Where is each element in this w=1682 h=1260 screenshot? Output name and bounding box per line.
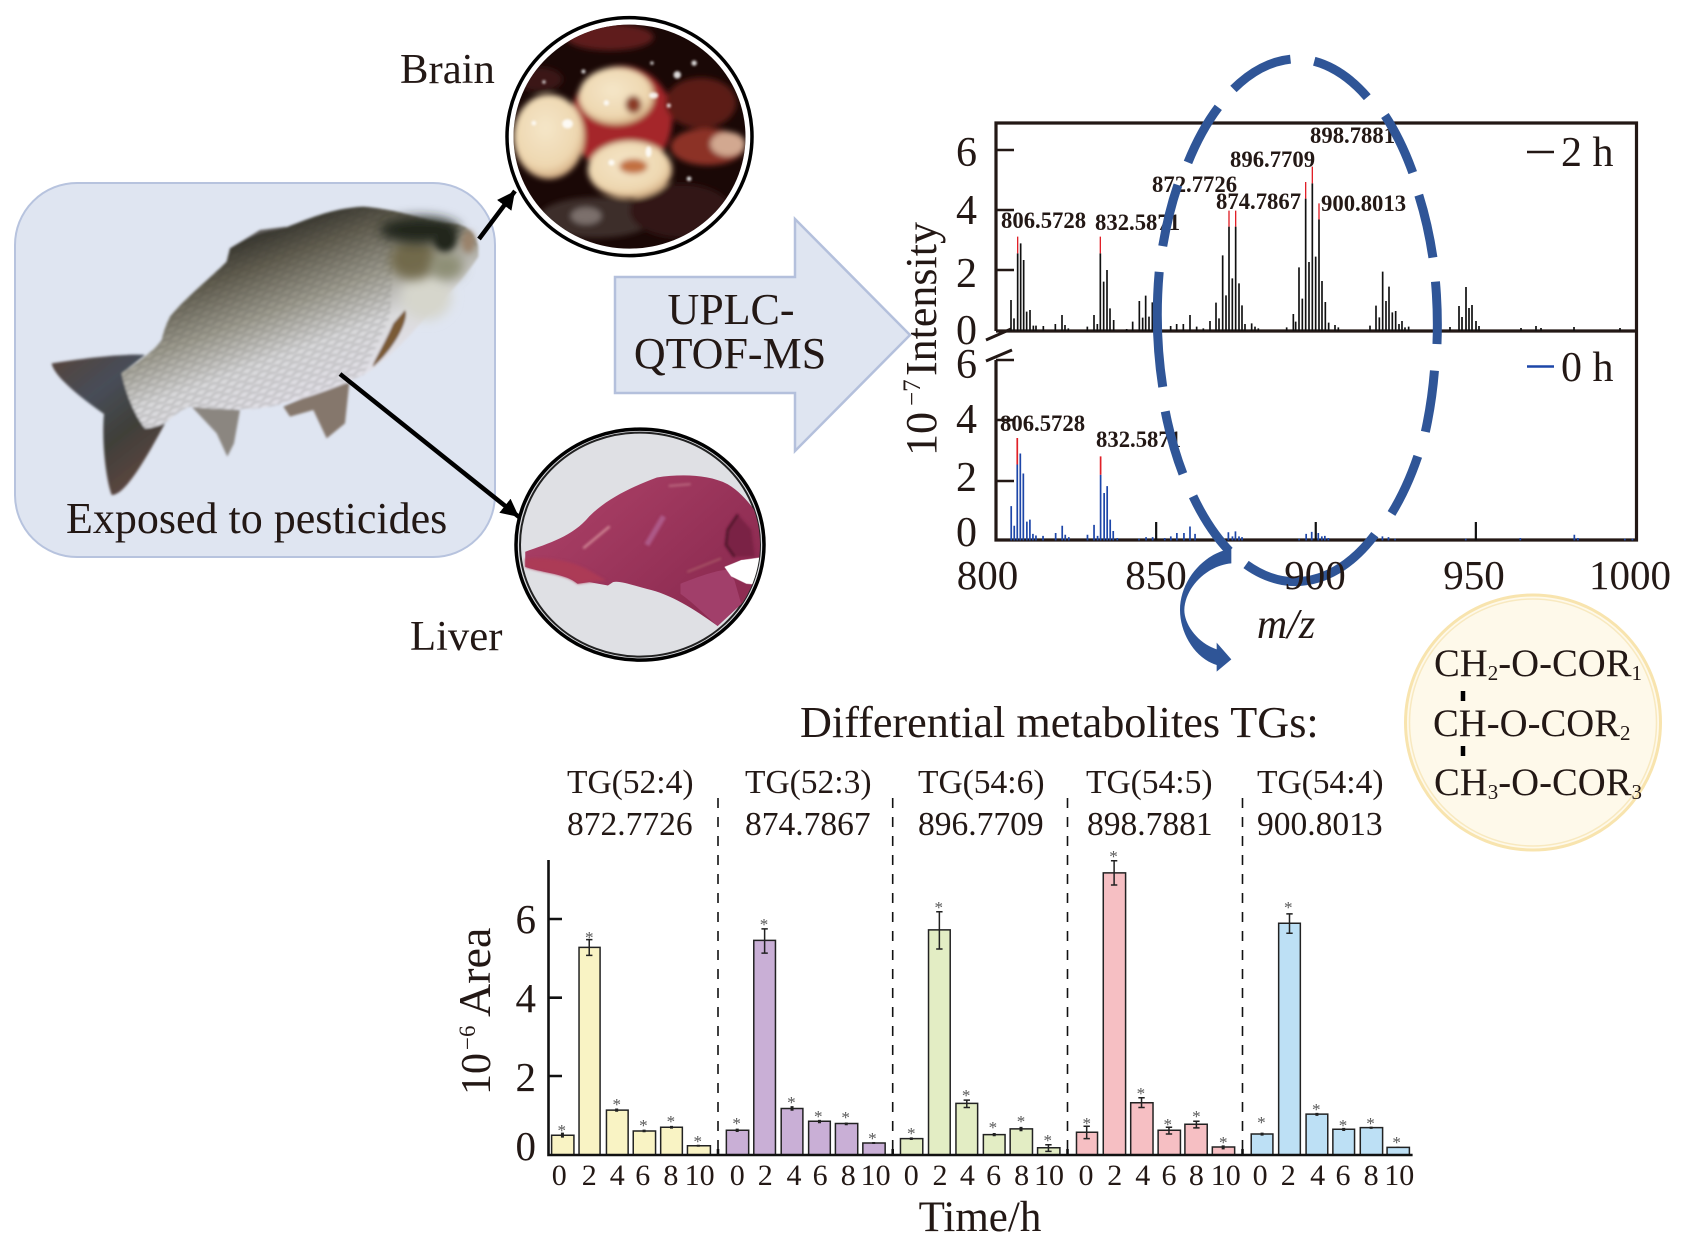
- spectrum y tick labels: 6: [956, 342, 977, 388]
- mass spectrum chart: [897, 123, 1636, 556]
- legend: 2 h: [1527, 130, 1614, 176]
- spectrum y axis label: −7: [899, 379, 926, 406]
- panel background: [15, 183, 495, 557]
- column headers: TG names and m/z: 874.7867: [745, 806, 871, 843]
- bar chart x ticks: 4: [1310, 1159, 1325, 1192]
- bar chart x ticks: 4: [960, 1159, 975, 1192]
- column headers: TG names and m/z: 896.7709: [918, 806, 1044, 843]
- big arrow: UPLC-QTOF-MS: [615, 219, 910, 451]
- formula line 3: CH: [1434, 762, 1488, 804]
- spectrum y tick labels: 0: [956, 510, 977, 556]
- formula line 3: 3: [1488, 780, 1498, 804]
- column headers: TG names and m/z: 900.8013: [1257, 806, 1383, 843]
- formula line 1: -O-COR: [1498, 643, 1632, 685]
- panel: fish exposed to pesticides: [15, 183, 495, 557]
- legend: 0 h: [1527, 345, 1614, 391]
- column headers: TG names and m/z: TG(54:6): [918, 764, 1045, 801]
- spectrum y tick labels: 6: [956, 130, 977, 176]
- bar chart x ticks: 2: [932, 1159, 948, 1192]
- bar chart: [449, 798, 1414, 1241]
- image: liver circle: [516, 429, 765, 660]
- spectrum y tick labels: [956, 130, 977, 556]
- bar chart x ticks: 4: [610, 1159, 625, 1192]
- spectrum x tick labels: 1000: [1589, 552, 1671, 598]
- label: liver: Liver: [410, 613, 502, 660]
- triglyceride structure circle: [1406, 595, 1660, 850]
- spectrum y tick labels: 2: [956, 251, 977, 297]
- spectrum axes frame: [986, 123, 1636, 540]
- spectrum x tick labels: 800: [957, 552, 1018, 598]
- peak labels 0 h: [1000, 411, 1181, 452]
- bar chart x ticks: 2: [1107, 1159, 1122, 1192]
- bar chart x ticks: 6: [1336, 1159, 1350, 1192]
- arrow: fish body to liver: [340, 374, 519, 517]
- spectrum y tick labels: 4: [956, 188, 977, 234]
- formula line 1: CH: [1434, 643, 1488, 685]
- peak labels 2 h: 874.7867: [1216, 189, 1301, 214]
- 2 h spectrum peaks: [1011, 167, 1620, 331]
- formula line 1: 2: [1488, 661, 1498, 685]
- bar chart y ticks: 4: [516, 975, 536, 1021]
- bar chart axes: [548, 860, 1413, 1155]
- bars: TG(54:5): [1076, 861, 1235, 1155]
- spectrum x tick labels: 900: [1284, 552, 1346, 598]
- formula line 2: CH-O-COR: [1433, 703, 1620, 745]
- column headers: TG names and m/z: TG(54:5): [1086, 764, 1213, 801]
- bar chart x ticks: 6: [986, 1159, 1001, 1192]
- bars: TG(52:3): [726, 929, 885, 1155]
- bars: TG(54:4): [1251, 914, 1409, 1155]
- column headers: TG names and m/z: TG(54:4): [1257, 764, 1384, 801]
- 0 h spectrum peaks: [1011, 438, 1632, 540]
- bar chart x ticks: 8: [1014, 1159, 1029, 1192]
- arrow: fish head to brain: [479, 191, 515, 239]
- column headers: TG names and m/z: 872.7726: [567, 806, 693, 843]
- bar chart x ticks: 10: [1384, 1159, 1414, 1192]
- bond dashes: [1461, 691, 1465, 756]
- formula line 2: 2: [1620, 721, 1630, 745]
- bar chart y ticks: [516, 896, 536, 1169]
- image: brain circle: [505, 15, 755, 258]
- spectrum y tick labels: 0: [956, 308, 977, 354]
- bar chart y axis label: −6: [455, 1026, 480, 1050]
- bar chart x ticks: 8: [663, 1159, 678, 1192]
- arrow label: QTOF-MS: [634, 329, 826, 378]
- spectrum x tick labels: 850: [1125, 552, 1187, 598]
- bar chart x ticks: 4: [1135, 1159, 1150, 1192]
- bar chart x ticks: 8: [1189, 1159, 1204, 1192]
- spectrum y axis label: Intensity: [897, 222, 946, 376]
- spectrum y axis label: 10: [897, 412, 946, 456]
- formula line 3: 3: [1632, 780, 1642, 804]
- column headers: TG names and m/z: [567, 764, 1384, 843]
- bar chart x ticks: [552, 1159, 1414, 1192]
- bars: TG(54:6): [900, 912, 1060, 1155]
- peak labels 2 h: 900.8013: [1321, 191, 1406, 216]
- caption: exposed to pesticides: Exposed to pesticides: [66, 494, 447, 543]
- spectrum y tick labels: 4: [956, 397, 977, 443]
- bar chart x ticks: 0: [1078, 1159, 1094, 1192]
- peak labels 0 h: 832.5871: [1096, 427, 1181, 452]
- peak labels 2 h: [1001, 123, 1406, 235]
- column headers: TG names and m/z: 898.7881: [1087, 806, 1213, 843]
- spectrum y tick labels: 2: [956, 455, 977, 501]
- arrow label: UPLC-: [667, 285, 795, 334]
- peak labels 0 h: 806.5728: [1000, 411, 1085, 436]
- legend: 0 h: 0 h: [1561, 345, 1614, 391]
- bar chart x ticks: 8: [1364, 1159, 1379, 1192]
- significance asterisks: ******: [907, 898, 1052, 1150]
- bar chart x ticks: 10: [1211, 1159, 1241, 1192]
- peak labels 2 h: 832.5871: [1095, 210, 1180, 235]
- peak labels 2 h: 896.7709: [1230, 147, 1315, 172]
- peak labels 2 h: 872.7726: [1152, 172, 1237, 197]
- bar chart x ticks: 8: [841, 1159, 856, 1192]
- bar chart x ticks: 6: [1162, 1159, 1176, 1192]
- bar chart x ticks: 0: [904, 1159, 919, 1192]
- bar chart x ticks: 2: [758, 1159, 773, 1192]
- significance asterisks: ******: [1082, 847, 1227, 1152]
- spectrum x tick labels: [957, 552, 1671, 598]
- spectrum x tick labels: 950: [1443, 552, 1505, 598]
- dashed ellipse highlighting TG peaks: [1157, 59, 1437, 582]
- bar chart x ticks: 10: [685, 1159, 715, 1192]
- image: fish: [52, 207, 478, 495]
- curved arrow to TG section: [1180, 549, 1231, 672]
- bar chart x ticks: 0: [730, 1159, 745, 1192]
- significance asterisks: [558, 847, 1401, 1152]
- label: brain: Brain: [400, 46, 495, 93]
- formula line 1: 1: [1632, 661, 1642, 685]
- bar chart y axis label: Area: [449, 928, 500, 1017]
- bar chart y ticks: 2: [516, 1054, 536, 1100]
- bar chart x ticks: 10: [861, 1159, 891, 1192]
- bar chart x ticks: 0: [552, 1159, 567, 1192]
- bar chart x ticks: 4: [786, 1159, 802, 1192]
- bar chart x ticks: 2: [1281, 1159, 1296, 1192]
- bar chart x ticks: 10: [1034, 1159, 1064, 1192]
- peak labels 2 h: 806.5728: [1001, 208, 1086, 233]
- peak labels 2 h: 898.7881: [1310, 123, 1395, 148]
- bar chart y ticks: 6: [516, 896, 536, 942]
- bar chart y axis label: 10: [454, 1053, 500, 1095]
- formula line 3: -O-COR: [1498, 762, 1632, 804]
- spectrum x axis label: m/z: [1257, 602, 1315, 648]
- significance asterisks: ******: [558, 928, 702, 1151]
- bar chart x ticks: 6: [813, 1159, 828, 1192]
- bar chart x ticks: 2: [582, 1159, 597, 1192]
- column headers: TG names and m/z: TG(52:4): [567, 764, 694, 801]
- bar chart x ticks: 6: [635, 1159, 650, 1192]
- legend: 2 h: 2 h: [1561, 130, 1614, 176]
- bar chart y ticks: 0: [516, 1123, 536, 1169]
- significance asterisks: ******: [732, 915, 877, 1148]
- bars: TG(52:4): [552, 940, 710, 1155]
- bar chart x ticks: 0: [1253, 1159, 1268, 1192]
- significance asterisks: ******: [1257, 898, 1401, 1152]
- heading: differential metabolites: Differential metabolites TGs:: [800, 698, 1319, 747]
- bar chart x axis label: Time/h: [919, 1194, 1041, 1241]
- column headers: TG names and m/z: TG(52:3): [745, 764, 872, 801]
